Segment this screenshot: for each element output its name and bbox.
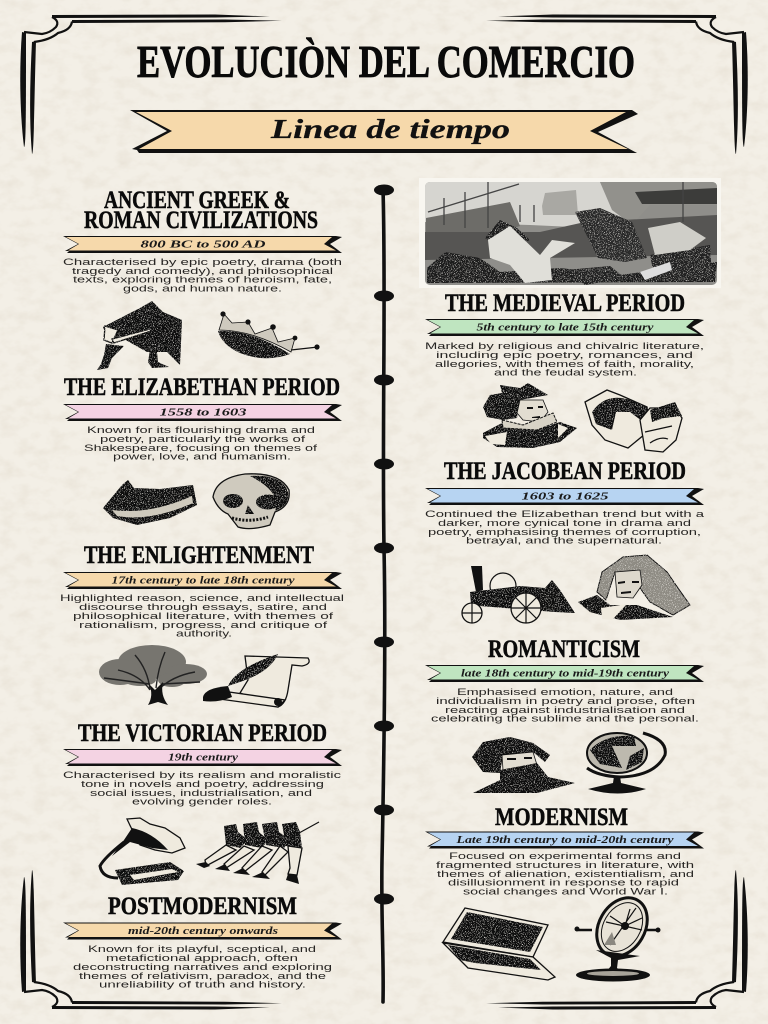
decorative corner: top right	[486, 14, 748, 154]
panel: the elizabethan period	[63, 372, 342, 529]
description	[73, 944, 332, 990]
panel: the jacobean period	[425, 456, 704, 623]
description: and the feudal system.	[494, 368, 637, 378]
icon: laptop	[443, 908, 555, 980]
heading: THE ELIZABETHAN PERIOD	[64, 372, 340, 401]
description: including epic poetry, romances, and	[436, 350, 693, 360]
icon: theatre masks	[585, 390, 682, 452]
description: power, love, and humanism.	[113, 452, 291, 462]
date ribbon: Late 19th century to mid-20th century	[455, 835, 674, 846]
description	[425, 509, 704, 546]
panel: postmodernism	[63, 891, 342, 990]
panel: the enlightenment	[60, 540, 344, 707]
date ribbon	[425, 832, 704, 848]
date ribbon	[63, 922, 342, 940]
description: social issues, industrialisation, and	[90, 788, 312, 798]
decorative corner: top left	[20, 14, 282, 154]
description: themes of relativism, paradox, and the	[79, 971, 326, 981]
description: Characterised by epic poetry, drama (both	[63, 257, 342, 267]
main ribbon: Linea de tiempo: Linea de tiempo	[270, 114, 510, 144]
heading: POSTMODERNISM	[108, 891, 297, 920]
icon: noblewoman portrait	[483, 383, 577, 448]
description: celebrating the sublime and the personal.	[431, 714, 699, 724]
description: individualism in poetry and prose, often	[436, 696, 695, 706]
description	[436, 851, 694, 896]
icon: tilted crown	[218, 311, 320, 358]
description: gods, and human nature.	[123, 284, 282, 294]
description: disillusionment in response to rapid	[448, 878, 679, 888]
date ribbon: 1558 to 1603	[160, 408, 246, 418]
description: Known for its playful, sceptical, and	[88, 944, 316, 954]
description: evolving gender roles.	[132, 796, 272, 806]
description: tragedy and comedy), and philosophical	[72, 266, 333, 276]
description: texts, exploring themes of heroism, fate,	[73, 274, 332, 284]
description: fragmented structures in literature, with	[436, 860, 694, 870]
description: darker, more cynical tone in drama and	[438, 518, 691, 528]
heading	[84, 185, 318, 234]
description: unreliability of truth and history.	[99, 980, 306, 990]
timeline	[374, 184, 394, 1002]
main ribbon: Linea de tiempo	[130, 110, 638, 153]
description: poetry, particularly the works of	[100, 434, 306, 444]
icon: marching soldiers	[196, 822, 319, 884]
description: themes of alienation, existentialism, and	[437, 869, 694, 879]
icon: crown	[103, 480, 197, 525]
illustration: harbour trade scene	[419, 178, 721, 288]
description: Highlighted reason, science, and intellectual	[60, 593, 344, 603]
icon: bearded man portrait	[472, 737, 575, 793]
icon: gramophone	[100, 818, 185, 885]
icon: wigged man portrait	[578, 555, 690, 620]
description: metafictional approach, often	[106, 953, 298, 963]
date ribbon: 17th century to late 18th century	[112, 576, 295, 586]
date ribbon	[63, 404, 342, 421]
description: betrayal, and the supernatural.	[466, 536, 662, 546]
date ribbon: mid-20th century onwards	[128, 926, 278, 937]
decorative corner: bottom left	[20, 870, 282, 1010]
description	[63, 257, 342, 294]
date ribbon: 1603 to 1625	[522, 492, 608, 502]
description: discourse through essays, satire, and	[79, 602, 327, 612]
description: tone in novels and poetry, addressing	[81, 779, 324, 789]
panel: ancient greek and roman civilizations	[63, 185, 342, 370]
heading: ROMANTICISM	[488, 634, 640, 663]
description: philosophical literature, with themes of	[73, 611, 334, 621]
description	[60, 593, 344, 638]
decorative corner: bottom right	[486, 870, 748, 1010]
heading: ANCIENT GREEK &	[104, 185, 290, 214]
description: Marked by religious and chivalric literature,	[425, 341, 704, 351]
icon: skull	[213, 474, 289, 529]
description: authority.	[176, 628, 232, 638]
heading: THE ENLIGHTENMENT	[84, 540, 314, 569]
date ribbon	[63, 572, 342, 589]
date ribbon	[63, 749, 342, 766]
icon: scroll and quill	[203, 654, 309, 707]
description: allegories, with themes of faith, morality,	[435, 359, 694, 369]
description	[425, 341, 704, 378]
icon: cloaked warrior	[97, 301, 182, 370]
panel: the medieval period	[425, 288, 704, 452]
panel: romanticism	[425, 634, 704, 794]
heading: THE VICTORIAN PERIOD	[78, 718, 327, 747]
date ribbon	[425, 488, 704, 505]
date ribbon	[425, 665, 704, 682]
heading: THE JACOBEAN PERIOD	[444, 456, 686, 485]
description: Known for its flourishing drama and	[87, 425, 315, 435]
date ribbon: late 18th century to mid-19th century	[461, 668, 670, 680]
heading: THE MEDIEVAL PERIOD	[445, 288, 685, 317]
description	[431, 687, 699, 724]
date ribbon: 800 BC to 500 AD	[140, 240, 266, 250]
date ribbon: 19th century	[168, 752, 239, 764]
heading: ROMAN CIVILIZATIONS	[84, 205, 318, 234]
description: poetry, emphasising themes of corruption,	[428, 527, 701, 537]
heading: MODERNISM	[495, 802, 628, 831]
description: Emphasised emotion, nature, and	[457, 687, 673, 697]
description: Shakespeare, focusing on themes of	[84, 443, 318, 453]
description: rationalism, progress, and critique of	[79, 620, 328, 630]
panel: modernism	[425, 802, 704, 982]
description: reacting against industrialisation and	[445, 705, 685, 715]
description	[63, 770, 342, 806]
icon: tree	[99, 645, 207, 705]
description: Characterised by its realism and moralistic	[63, 770, 342, 780]
date ribbon	[63, 236, 342, 253]
description: Focused on experimental forms and	[449, 851, 681, 861]
icon: globe	[587, 733, 665, 794]
description: social changes and World War I.	[463, 886, 668, 896]
panel: the victorian period	[63, 718, 342, 885]
description	[84, 425, 318, 462]
description: Continued the Elizabethan trend but with a	[425, 509, 704, 519]
date ribbon	[425, 319, 704, 336]
date ribbon: 5th century to late 15th century	[476, 322, 654, 334]
icon: steam engine	[462, 566, 575, 623]
description: deconstructing narratives and exploring	[73, 962, 332, 972]
icon: mirror on stand	[574, 889, 660, 982]
